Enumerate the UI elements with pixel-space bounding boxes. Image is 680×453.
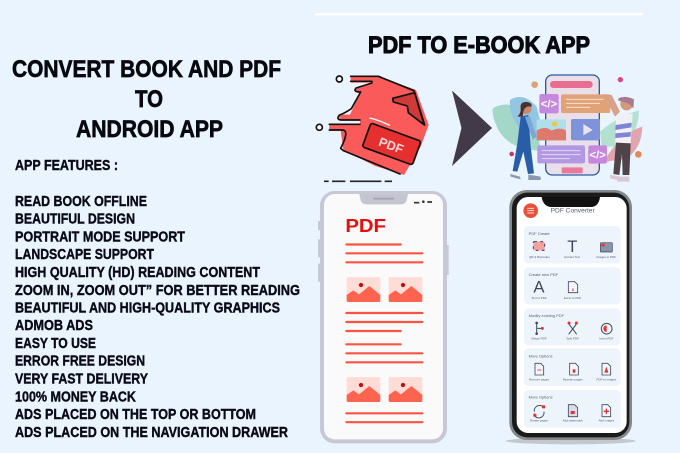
image placeholder top left [347, 277, 380, 302]
app header: PDF Converter [551, 208, 595, 214]
image placeholder bottom left [347, 377, 380, 402]
left title: TO [135, 86, 163, 113]
card: More Options 1: More Options [529, 354, 553, 359]
card: Modify existing PDF: Modify existing PDF [529, 313, 565, 318]
app features list: EASY TO USE [15, 336, 96, 352]
card: Create new PDF: Text to PDF [531, 296, 547, 300]
app features list: ADS PLACED ON THE TOP OR BOTTOM [15, 407, 256, 423]
app features list: PORTRAIT MODE SUPPORT [15, 230, 185, 246]
background leaves [493, 97, 642, 162]
illustration: app designers around phone: </> [589, 149, 606, 161]
left title: ANDROID APP [76, 116, 223, 143]
app header [523, 203, 595, 218]
app features list: ADMOB ADS [15, 318, 93, 334]
card: More Options 1: Remove pages [529, 378, 550, 382]
illustration: app designers around phone: </> [541, 98, 558, 110]
heading: PDF to e-book app: PDF TO E-BOOK APP [368, 32, 590, 59]
app features list: HIGH QUALITY (HD) READING CONTENT [15, 265, 260, 281]
app features list: ZOOM IN, ZOOM OUT” FOR BETTER READING [15, 283, 300, 299]
card: PDF Create: Extract Text [565, 255, 580, 259]
top white rule [315, 13, 643, 15]
icon: flying PDF file [316, 76, 429, 181]
card: More Options 1: Reorder pages [563, 378, 583, 382]
app features list: APP FEATURES : [15, 158, 118, 174]
card: PDF Create: T [567, 237, 577, 256]
man figure [603, 94, 634, 182]
card: More Options 2: Add watermark [563, 418, 583, 422]
decorative dots [509, 77, 642, 158]
card: Create new PDF: Excel to PDF [564, 296, 582, 300]
card: More Options 2: Add images [598, 418, 615, 422]
card: PDF Create: PDF Create [529, 231, 550, 236]
card: Modify existing PDF [524, 308, 621, 345]
app features list [15, 158, 300, 441]
app features list: READ BOOK OFFLINE [15, 194, 147, 210]
woman figure [510, 102, 541, 180]
image placeholder bottom right [389, 377, 422, 402]
card: Create new PDF: Create new PDF [529, 272, 559, 277]
arrow [452, 90, 492, 166]
app features list: BEAUTIFUL DESIGN [15, 212, 135, 228]
app features list: 100% MONEY BACK [15, 390, 136, 406]
app features list: ERROR FREE DESIGN [15, 354, 145, 370]
app features list: BEAUTIFUL AND HIGH-QUALITY GRAPHICS [15, 300, 280, 316]
card: More Options 2: Rotate pages [530, 418, 548, 422]
PDF label: PDF [345, 215, 386, 236]
left title: CONVERT BOOK AND PDF [12, 56, 281, 83]
icon: flying PDF file: PDF [377, 135, 406, 157]
card: Create new PDF: x [572, 287, 575, 292]
illustration: app designers around phone [493, 75, 642, 182]
phone in illustration [546, 75, 599, 175]
card: Modify existing PDF: Invert PDF [599, 337, 614, 341]
card: PDF Create: QR & Barcodes [529, 255, 550, 259]
card: PDF Create: Images to PDF [596, 255, 616, 259]
phone mockup: PDF page [318, 191, 449, 443]
card: PDF Create [524, 226, 621, 263]
app features list: ADS PLACED ON THE NAVIGATION DRAWER [15, 425, 288, 441]
card: Create new PDF [524, 267, 621, 304]
card: Create new PDF: A [533, 278, 545, 297]
image placeholder top right [389, 277, 422, 302]
card: More Options 1: PDF to images [596, 378, 617, 382]
card: Modify existing PDF: Split PDF [566, 337, 579, 341]
text lines [346, 244, 422, 422]
app features list: LANDSCAPE SUPPORT [15, 247, 154, 263]
card: Modify existing PDF: Merge PDF [531, 337, 547, 341]
app features list: VERY FAST DELIVERY [15, 372, 148, 388]
phone mockup: PDF Converter app [506, 190, 636, 444]
card: More Options 2: More Options [529, 395, 553, 400]
card: More Options 2 [524, 390, 621, 428]
card: More Options 1 [524, 348, 621, 386]
left title [12, 56, 281, 143]
